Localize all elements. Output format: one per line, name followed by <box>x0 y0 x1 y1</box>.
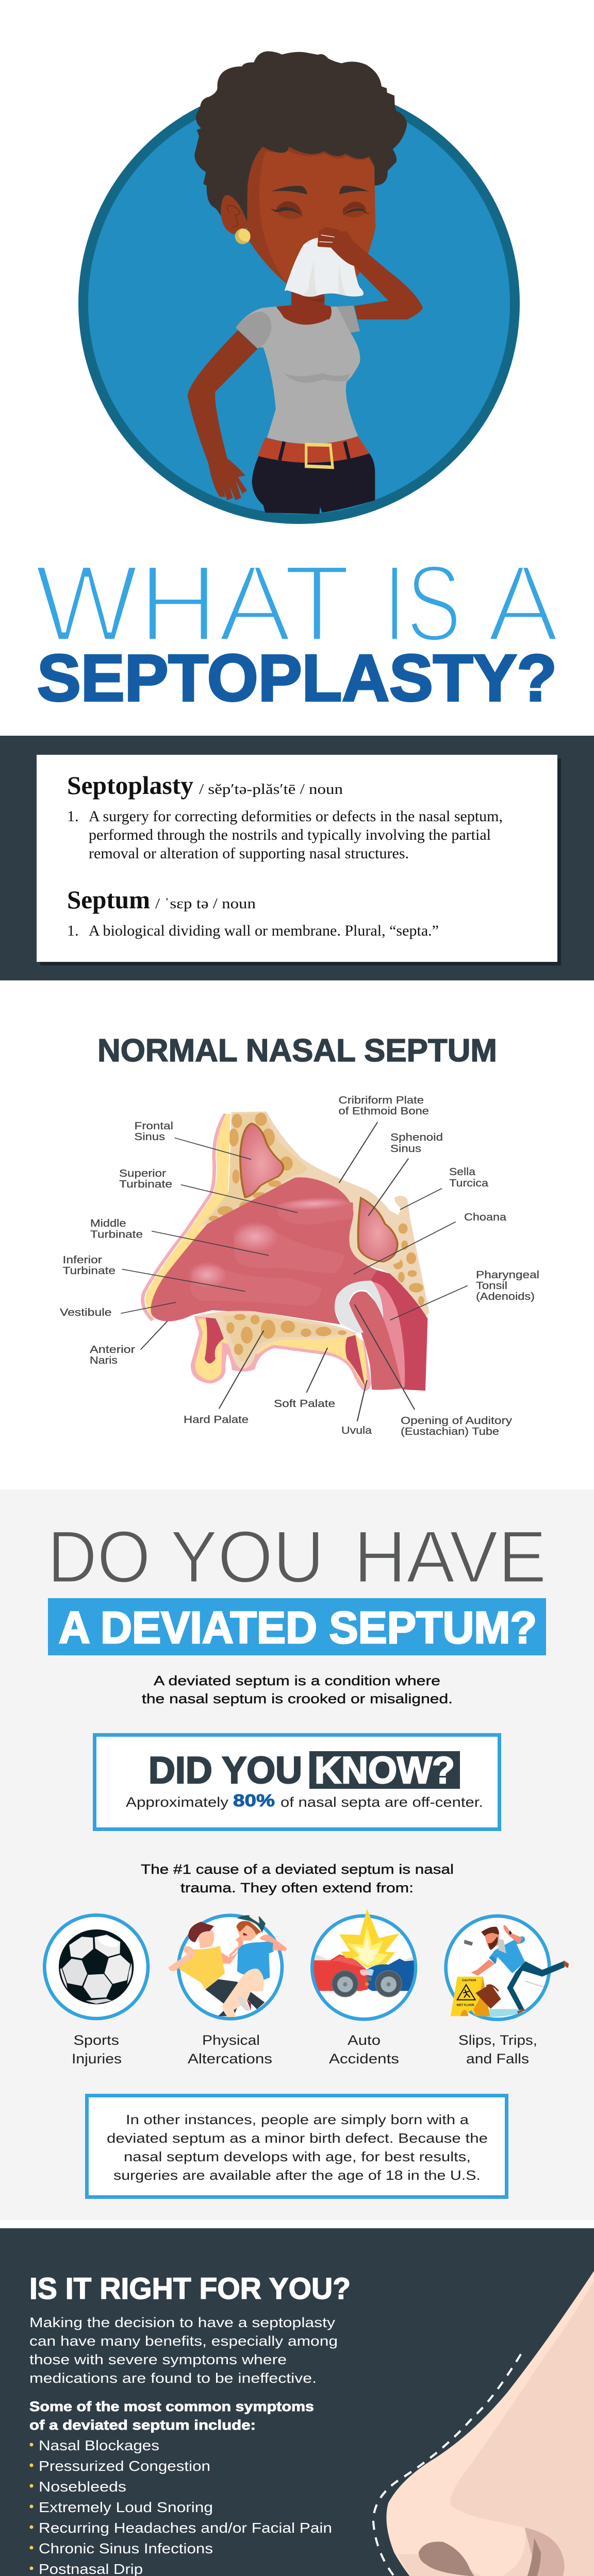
icon: two people fighting, physical altercations <box>169 1914 287 2019</box>
callout: did you know <box>95 1735 499 1829</box>
heading: do you have: YOU <box>170 1516 324 1598</box>
anatomy labels: Soft Palate <box>274 1398 335 1410</box>
callout: did you know: KNOW? <box>315 1750 455 1791</box>
callout: birth defect note: In other instances, people are simply born with a <box>126 2112 469 2127</box>
panel: is it right for you <box>0 2228 594 2576</box>
heading: do you have: HAVE <box>354 1516 547 1598</box>
definition: septum <box>67 885 439 939</box>
anatomy labels: Naris <box>90 1354 118 1366</box>
callout: did you know: of nasal septa are off-center. <box>280 1794 483 1810</box>
panel: do you have a deviated septum <box>0 1489 594 2220</box>
text: number one cause <box>141 1861 454 1895</box>
anatomy labels: Uvula <box>341 1425 372 1436</box>
anatomy labels: Opening of Auditory <box>401 1415 513 1427</box>
illustration: nose profile with dashed line <box>373 2271 594 2576</box>
subheading: common symptoms <box>29 2399 314 2433</box>
definition: septum: Septum <box>67 885 150 914</box>
caption: slips trips and falls <box>458 2032 537 2066</box>
list: symptoms: Chronic Sinus Infections <box>39 2540 213 2556</box>
anatomy labels: Turbinate <box>90 1228 143 1241</box>
list: symptoms: Recurring Headaches and/or Facial Pain <box>39 2520 332 2536</box>
anatomy labels: Sinus <box>134 1131 165 1143</box>
anatomy labels: (Eustachian) Tube <box>401 1426 499 1437</box>
definition: septoplasty: 1. <box>67 808 78 825</box>
anatomy labels: Frontal <box>134 1120 173 1132</box>
caption: slips trips and falls: Slips, Trips, <box>458 2032 537 2048</box>
callout: birth defect note: surgeries are available after the age of 18 in the U.S. <box>113 2167 481 2183</box>
text: definition of deviated septum: the nasal septum is crooked or misaligned. <box>142 1691 453 1706</box>
text: intro paragraph: those with severe symptoms where <box>29 2352 287 2367</box>
text: intro paragraph: medications are found to be ineffective. <box>29 2370 317 2386</box>
caption: auto accidents <box>329 2032 399 2066</box>
heading: do you have <box>47 1516 547 1598</box>
caption: sports injuries: Injuries <box>72 2051 122 2066</box>
text: definition of deviated septum <box>142 1673 453 1706</box>
definition: septum: A biological dividing wall or membrane. Plural, “septa.” <box>89 922 439 939</box>
icon: man slipping on wet floor <box>446 1916 569 2020</box>
panel: hero <box>35 51 559 715</box>
anatomy labels: Sphenoid <box>390 1131 443 1143</box>
title: septoplasty: SEPTOPLASTY? <box>37 641 557 715</box>
title: what is a: IS <box>383 542 461 664</box>
panel: normal nasal septum <box>60 1033 539 1437</box>
anatomy labels <box>60 1094 539 1437</box>
anatomy labels: (Adenoids) <box>476 1291 535 1302</box>
callout: birth defect note <box>87 2096 506 2197</box>
caption: sports injuries <box>72 2032 122 2066</box>
heading: normal nasal septum: NORMAL NASAL SEPTUM <box>97 1033 497 1069</box>
callout: birth defect note: deviated septum as a minor birth defect. Because the <box>107 2130 488 2146</box>
caption: auto accidents: Accidents <box>329 2051 399 2066</box>
text: number one cause: trauma. They often extend from: <box>180 1880 414 1895</box>
anatomy labels: Inferior <box>63 1254 102 1266</box>
definition: septoplasty: / sĕp′tə-plăs′tē / noun <box>199 782 343 798</box>
illustration: woman blowing nose in blue circle <box>84 51 515 519</box>
definition: septum: / ˈsɛp tə / noun <box>155 896 256 912</box>
caption: physical altercations: Altercations <box>188 2051 272 2066</box>
list: symptoms: Pressurized Congestion <box>39 2458 210 2474</box>
anatomy labels: Hard Palate <box>184 1414 249 1426</box>
text: intro paragraph: Making the decision to have a septoplasty <box>29 2315 336 2330</box>
list: symptoms: Extremely Loud Snoring <box>39 2499 213 2515</box>
anatomy labels: Sinus <box>390 1143 421 1155</box>
icon: man slipping on wet floor: WET FLOOR <box>457 2004 474 2007</box>
callout: did you know: DID YOU <box>148 1750 302 1791</box>
callout: birth defect note: nasal septum develops with age, for best results, <box>124 2149 471 2164</box>
callout: did you know: 80% <box>233 1791 275 1810</box>
anatomy labels: Superior <box>119 1167 166 1179</box>
definition: septoplasty: performed through the nostrils and typically involving the partial <box>89 826 491 843</box>
text: definition of deviated septum: A deviated septum is a condition where <box>154 1673 440 1688</box>
definition: septoplasty: removal or alteration of supporting nasal structures. <box>89 845 409 862</box>
anatomy labels: of Ethmoid Bone <box>338 1105 429 1117</box>
subheading: common symptoms: of a deviated septum include: <box>29 2417 256 2433</box>
definition: septoplasty: Septoplasty <box>67 771 193 800</box>
leader lines <box>121 1123 467 1421</box>
caption: physical altercations <box>188 2032 272 2066</box>
caption: physical altercations: Physical <box>202 2032 260 2048</box>
icon: soccer ball, sports injuries <box>44 1915 148 2019</box>
title: what is a: WHAT <box>35 542 351 664</box>
list: symptoms: Nosebleeds <box>39 2479 126 2495</box>
anatomy labels: Vestibule <box>60 1307 111 1318</box>
text: intro paragraph <box>29 2315 338 2386</box>
text: intro paragraph: can have many benefits, especially among <box>29 2333 338 2349</box>
heading: is it right for you: IS IT RIGHT FOR YOU? <box>29 2272 351 2306</box>
callout: did you know: Approximately <box>126 1794 229 1810</box>
panel: dictionary definitions <box>0 736 594 980</box>
anatomy labels: Anterior <box>90 1344 135 1355</box>
text: number one cause: The #1 cause of a deviated septum is nasal <box>141 1861 454 1877</box>
anatomy labels: Pharyngeal <box>476 1269 539 1281</box>
title: what is a: A <box>487 542 559 664</box>
anatomy labels: Middle <box>90 1217 126 1229</box>
heading banner: a deviated septum: A DEVIATED SEPTUM? <box>59 1603 537 1653</box>
definition: septoplasty: A surgery for correcting deformities or defects in the nasal septum, <box>89 808 503 825</box>
icon: man slipping on wet floor: CAUTION <box>462 1979 476 1982</box>
caption: sports injuries: Sports <box>73 2032 119 2048</box>
anatomy labels: Choana <box>464 1211 507 1223</box>
list: symptoms <box>30 2437 332 2576</box>
caption: auto accidents: Auto <box>348 2032 381 2048</box>
anatomy labels: Tonsil <box>476 1280 507 1292</box>
anatomy labels: Turbinate <box>63 1265 116 1277</box>
definition: septum: 1. <box>67 922 78 939</box>
anatomy labels: Turcica <box>449 1177 489 1189</box>
anatomy labels: Turbinate <box>119 1178 172 1190</box>
diagram: nasal cross-section <box>121 1111 467 1421</box>
caption: slips trips and falls: and Falls <box>466 2051 529 2066</box>
anatomy labels: Sella <box>449 1166 476 1178</box>
definition: septoplasty <box>67 771 503 862</box>
heading: do you have: DO <box>47 1516 151 1598</box>
subheading: common symptoms: Some of the most common symptoms <box>29 2399 314 2414</box>
title: what is a <box>35 542 559 664</box>
anatomy labels: Cribriform Plate <box>338 1094 424 1106</box>
list: symptoms: Nasal Blockages <box>39 2437 159 2453</box>
icon: car crash, auto accidents <box>312 1909 416 2019</box>
